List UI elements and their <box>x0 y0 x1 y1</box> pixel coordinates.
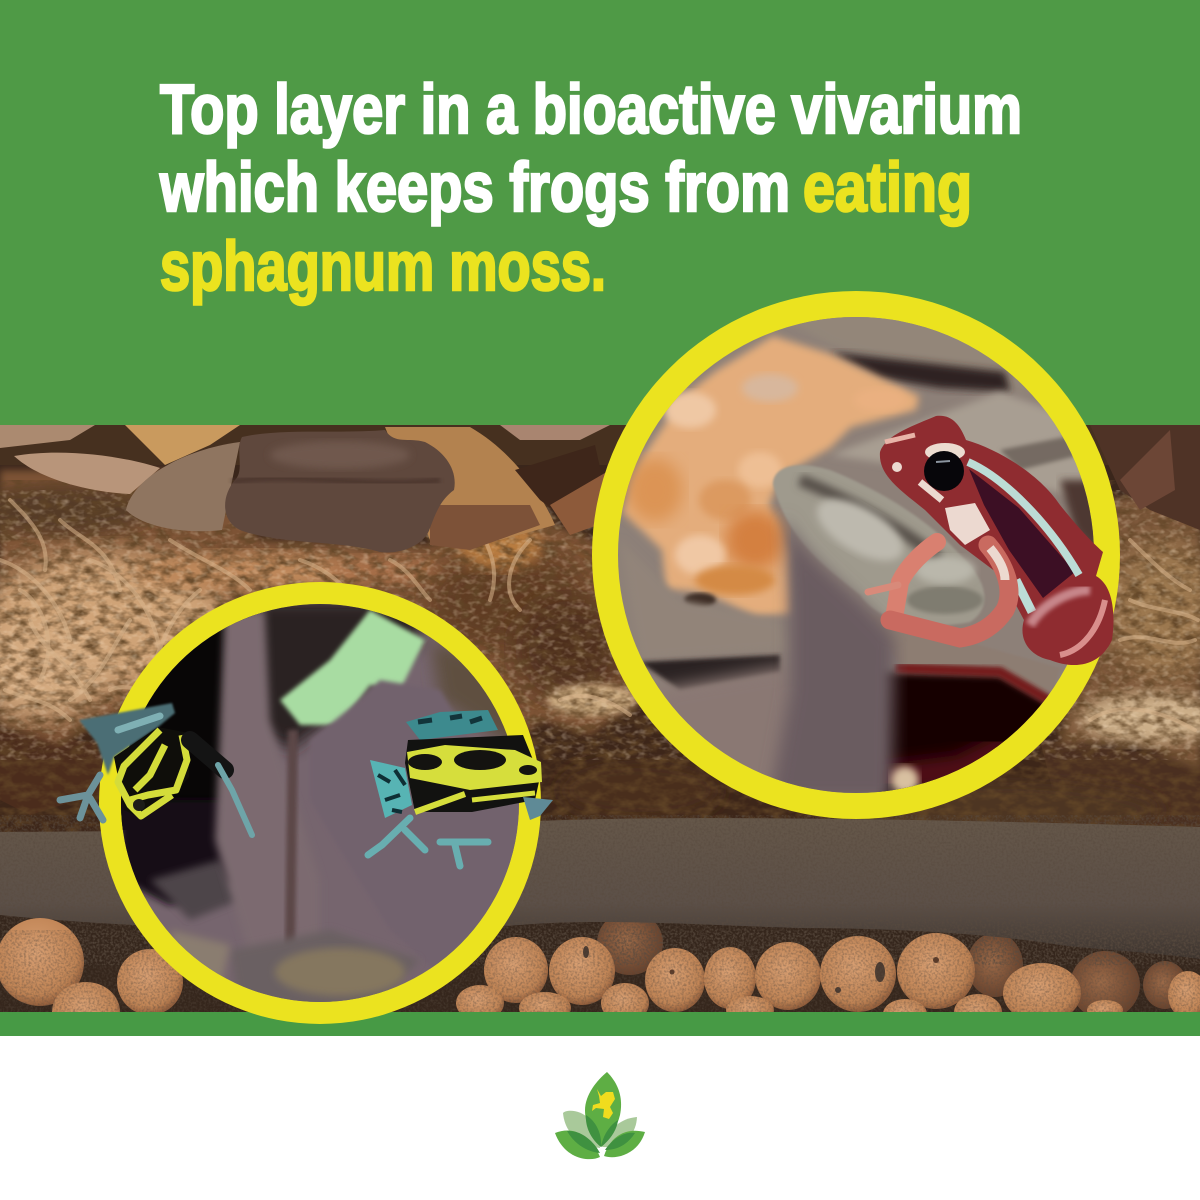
soil layer <box>0 730 1200 827</box>
title <box>159 70 1022 305</box>
leaf litter layer <box>0 425 1200 550</box>
clay balls behind the log <box>597 922 1184 1012</box>
moss layer <box>0 470 1200 770</box>
front clay balls <box>0 918 1200 1012</box>
photo: vivarium substrate layers <box>0 425 1200 1042</box>
wooden log <box>0 818 1200 959</box>
frog body <box>868 416 1113 665</box>
grey seed <box>773 465 984 625</box>
right frog <box>368 710 553 866</box>
blurred moss inside circle <box>623 336 919 617</box>
title: sphagnum moss. <box>160 227 606 305</box>
blurred foreground stem <box>770 515 895 800</box>
logo: leaves with frog <box>555 1072 645 1159</box>
circle photo: yellow and black frogs <box>60 582 553 1024</box>
circle photo: red and white frog <box>592 291 1120 819</box>
icon: pecan shell <box>225 430 455 553</box>
moss fibres <box>0 500 1198 730</box>
left frog <box>60 703 252 835</box>
green header panel <box>0 0 1200 425</box>
title: which keeps frogs from <box>159 148 790 226</box>
green footer band <box>0 1012 1200 1036</box>
title: eating <box>803 148 972 226</box>
